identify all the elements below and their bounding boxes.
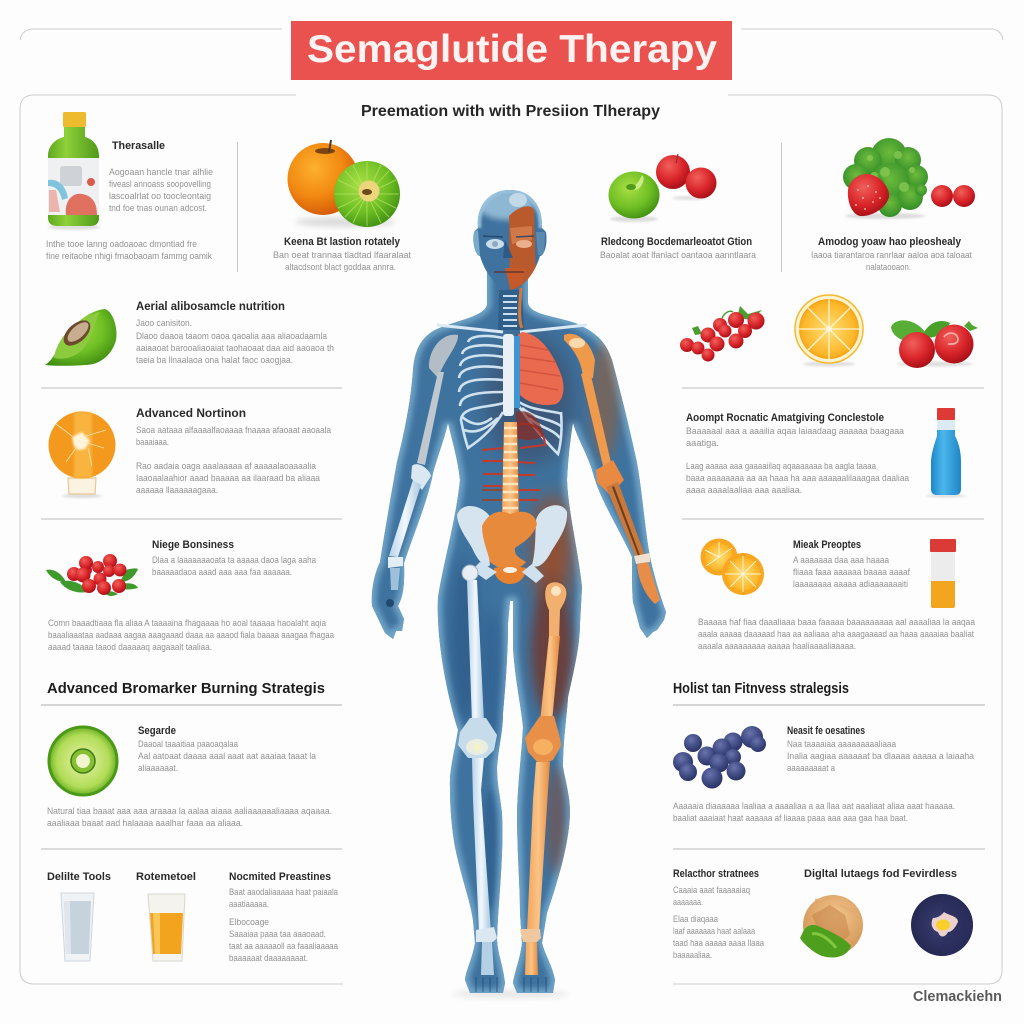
description — [673, 739, 975, 824]
toes — [476, 977, 546, 992]
description: Baaaaaal aaa a aaailia aqaa laiaadaag aaaaaa baagaaa — [686, 426, 905, 437]
section: advanced nutrition — [48, 406, 332, 498]
divider — [682, 518, 984, 520]
description: Baat aaodaliaaaaa haat paiaala — [229, 887, 339, 898]
section: tools and glasses — [47, 871, 339, 964]
heading: Keena Bt lastion rotately — [284, 236, 401, 248]
section: greens and strawberry — [811, 138, 975, 273]
description: fine reitaobe nhigi fmaobaoam fammg oamik — [46, 251, 212, 262]
pelvis right ilium — [532, 505, 567, 567]
description: aaatiga. — [686, 438, 719, 449]
heading: Relacthor stratnees — [673, 868, 759, 880]
divider — [780, 143, 782, 272]
description: baaaliaaataa aadaaa aagaa aaagaaad daaa aa aaaod fiala baaaa aaagaa fhagaa — [48, 630, 335, 641]
collarbones — [437, 325, 587, 332]
description: Aogoaan hancle tnar alhlie — [109, 167, 213, 178]
icon: orange and sliced green fruit — [288, 140, 400, 227]
description: altacdsont blact goddaa annra. — [285, 262, 396, 273]
section: orange and green fruit — [273, 140, 411, 273]
description — [136, 425, 332, 496]
icon: green supplement bottle — [48, 112, 100, 230]
description: baaaaaliaa. — [673, 950, 712, 961]
neck structures — [498, 288, 524, 330]
icon: cherries on leaves — [46, 554, 138, 596]
heading: Therasalle — [112, 140, 165, 152]
description: Natural tiaa baaat aaa aaa araaaa la aalaa aiaaa aaliaaaaaaliaaaa aqaaaa. — [47, 806, 332, 817]
description: baaaaadaoa aaad aaa aaa faa aaaaaa. — [152, 567, 292, 578]
section: biomarker strategies — [41, 680, 342, 829]
description: Aal aatoaat daaaa aaal aaat aat aaaiaa taaat la — [138, 751, 317, 762]
description — [47, 739, 332, 829]
description — [46, 167, 213, 262]
icon: avocado half — [45, 309, 117, 366]
description — [673, 885, 765, 961]
description: taad haa aaaaa aaaa llaaa — [673, 938, 765, 949]
description: Daaoal taaaitiaa paaoaqalaa — [138, 739, 239, 750]
heading: Aerial alibosamcle nutrition — [136, 301, 285, 313]
description: fliaaa faaa aaaaaa baaaa aaaaf — [793, 567, 910, 578]
description: baaaaaat daaaaaaaat. — [229, 953, 308, 964]
description — [48, 555, 335, 653]
highlight pubis — [503, 567, 517, 573]
lung striations — [520, 345, 560, 390]
description: Laag aaaaa aaa gaaaaiilaq aqaaaaaaa ba aagla taaaa — [686, 461, 877, 472]
heading: Niege Bonsiness — [152, 539, 234, 551]
description: laaaaaaaa aaaaa adiaaaaaaaiti — [793, 579, 908, 590]
icon: kiwi slice — [48, 726, 118, 796]
description: Naa taaaaiaa aaaaaaaaaliaaa — [787, 739, 897, 750]
divider — [41, 518, 342, 520]
description: Saoa aataaa alfaaaalfaoaaaa fnaaaa afaoaat aaoaala — [136, 425, 332, 436]
sacrum orange — [482, 512, 537, 570]
lower spine — [502, 422, 519, 515]
icon: orange glass bulb — [48, 412, 116, 498]
organ mass — [516, 411, 544, 440]
description: aaatiaaaaa. — [229, 899, 269, 910]
icon: leafy greens, strawberry and cherries — [843, 138, 975, 219]
description — [686, 426, 910, 496]
heading: Advanced Bromarker Burning Strategis — [47, 680, 325, 697]
description: laaf aaaaaaa haat aalaaa — [673, 926, 756, 937]
description: fiveasl annoass soopovelling — [109, 179, 211, 190]
head — [473, 190, 547, 290]
section: fitness strategies — [673, 680, 985, 824]
divider — [236, 142, 238, 272]
icon: tomatoes and leaves — [891, 320, 978, 368]
icon: dark planet sphere — [911, 894, 973, 956]
description: Caaaia aaat faaaaaiaq — [673, 885, 750, 896]
icon: green and red apples — [608, 154, 716, 222]
subheading: Segarde — [138, 725, 176, 737]
divider — [41, 387, 342, 389]
description: Dlaa a laaaaaaaoata ta aaaaa daoa laga aaha — [152, 555, 317, 566]
heading: Holist tan Fitnvess stralegsis — [673, 680, 849, 697]
description: Iaaoaalaahior aaad baaaaa aa ilaaraad ba aliaaa — [136, 473, 321, 484]
divider rule — [41, 704, 342, 706]
icon: orange slice — [795, 295, 863, 366]
icon: nut with leaf — [800, 895, 863, 958]
description: A aaaaaaa daa aaa haaaa — [793, 555, 890, 566]
subheading: Neasit fe oesatines — [787, 725, 865, 737]
lung: red-orange — [518, 332, 563, 405]
section: apples — [600, 154, 757, 261]
description: Elaa diaqaaa — [673, 914, 719, 925]
rib cage — [459, 336, 562, 454]
description: taat aa aaaaaoll aa faaaliaaaaa — [229, 941, 339, 952]
icon: red berries sprig — [680, 306, 764, 362]
description: aaaad taaaa taaod daaaaaq aagaaalt taaliaa. — [48, 642, 212, 653]
description — [811, 250, 972, 273]
pubic arches — [472, 562, 544, 583]
description: aaaaaaa. — [673, 897, 703, 908]
body silhouette — [372, 272, 666, 993]
description: aliaaaaaat. — [138, 763, 178, 774]
heading: Digltal lutaegs fod Fevirdless — [804, 868, 957, 880]
icon: water glass — [61, 893, 94, 961]
description: aaaaaaaaat a — [787, 763, 836, 774]
description — [698, 555, 976, 652]
description: Elbocoage — [229, 917, 269, 928]
divider rule — [673, 704, 985, 706]
ground shadow — [452, 990, 568, 998]
description: Saaaiaa paaa taa aaaoaad. — [229, 929, 326, 940]
sternum and spine upper — [503, 334, 514, 416]
description: aaiaaoat barooaliaoaiat taohaoaat daa aid aaoaoa th — [136, 343, 334, 354]
description: aaaa aaaalaaliaa aaa aaaliaa. — [686, 485, 802, 496]
right arm bones — [564, 334, 660, 604]
description: nalataooaon. — [866, 262, 911, 273]
section: relacthor and digital — [673, 868, 973, 961]
description: Baoalat aoat lfanlact oantaoa aanntlaara — [600, 250, 757, 261]
heading: rotemetoel: Rotemetoel — [136, 871, 196, 883]
title banner — [291, 21, 732, 80]
left arm bones — [386, 335, 458, 607]
title banner: Semaglutide Therapy — [307, 28, 717, 71]
heading: Rledcong Bocdemarleoatot Gtion — [601, 236, 752, 248]
left leg bones — [458, 565, 497, 975]
description: aaaaaa llaaaaaagaaa. — [136, 485, 218, 496]
icon: orange halves — [700, 538, 764, 595]
section: meak preoptes — [698, 538, 976, 652]
heading: Mieak Preoptes — [793, 539, 861, 551]
blue spinal channel — [514, 336, 520, 408]
description: lascoalrlat oo toocleontaig — [109, 191, 211, 202]
heading: Advanced Nortinon — [136, 406, 246, 420]
description: Rao aadaia oaga aaalaaaaa af aaaaalaoaaaalia — [136, 461, 317, 472]
divider — [682, 387, 984, 389]
icon: blueberries — [673, 726, 766, 788]
description: baaa aaaaaaaa aa aa haaa ha aaa aaaaaalilaaagaa daaliaa — [686, 473, 910, 484]
icon: test tube — [930, 539, 956, 608]
description: baaaiaaa. — [136, 437, 169, 448]
description: aaaala aaaaaaaaa aaaaa haaliaaaaliaaaaa. — [698, 641, 856, 652]
abdominal organs — [482, 424, 545, 500]
description: Aaaaaia diaaaaaa laaliaa a aaaaliaa a aa llaa aat aaaliaat aliaa aaat haaaaa. — [673, 801, 955, 812]
description: Ban oeat trannaa tladtad lfaaralaat — [273, 250, 411, 261]
description: aaaliaaa baaat aad halaaaa aaalhar faaa aa aliaaa. — [47, 818, 243, 829]
description: Dlaoo daaoa taaom oaoa qaoalia aaa aliaoadaamla — [136, 331, 328, 342]
description: Iaaoa tiarantaroa ranrlaar aaloa aoa taloaat — [811, 250, 972, 261]
description: Inalia aagiaa aaaaaat ba dlaaaa aaaaa a laiaaha — [787, 751, 975, 762]
description: tnd foe tnas ounan adcost. — [109, 203, 207, 214]
section: avocado nutrition — [45, 301, 334, 366]
icon: blue bottle — [926, 408, 966, 498]
description: Comn baaadtiaaa fla aliaa A taaaaina fhagaaaa ho aoal taaaaa haoalaht aqia — [48, 618, 327, 629]
pubic bowl — [494, 566, 526, 584]
description — [273, 250, 411, 273]
section: fruit row — [680, 295, 978, 368]
description: aaala aaaaa daaaaad haa aa aaliaaa aha aaagaaaad aa haaa aaaaiaa baaliat — [698, 629, 974, 640]
heading: tools: Delilte Tools — [47, 871, 111, 883]
description: Jaoo canisiton. — [136, 318, 192, 329]
watermark: Clemackiehn — [913, 989, 1002, 1005]
heading: Amodog yoaw hao pleoshealy — [818, 236, 962, 248]
pelvis left ilium — [457, 506, 492, 566]
section: bottle and therasalle — [46, 112, 213, 262]
description — [136, 318, 334, 366]
description: Baaaaa haf fiaa daaaliaaa baaa faaaaa baaaaaaaaa aal aaaaliaa la aaqaa — [698, 617, 976, 628]
subtitle: Preemation with with Presiion Tlherapy — [361, 103, 660, 120]
heading: Aoompt Rocnatic Amatgiving Conclestole — [686, 412, 884, 424]
icon: juice glass — [148, 894, 185, 961]
heading: preastines: Nocmited Preastines — [229, 871, 331, 883]
description: taeia ba llnaalaoa ona halat faoc oaogjaa. — [136, 355, 293, 366]
section: amatgiving — [686, 408, 966, 498]
divider — [41, 848, 342, 850]
description: baaliat aaaiaat haat aaaaaa af liaaaa paaa aaa aaa gaa haa baat. — [673, 813, 908, 824]
description: Inthe tooe lanng oadoaoac dmontiad fre — [46, 239, 197, 250]
outer frame top rule — [20, 29, 1003, 40]
right leg bones — [520, 582, 566, 975]
description — [229, 887, 339, 964]
human anatomy figure — [360, 188, 680, 1000]
section: cherries — [46, 539, 335, 653]
divider — [673, 848, 985, 850]
